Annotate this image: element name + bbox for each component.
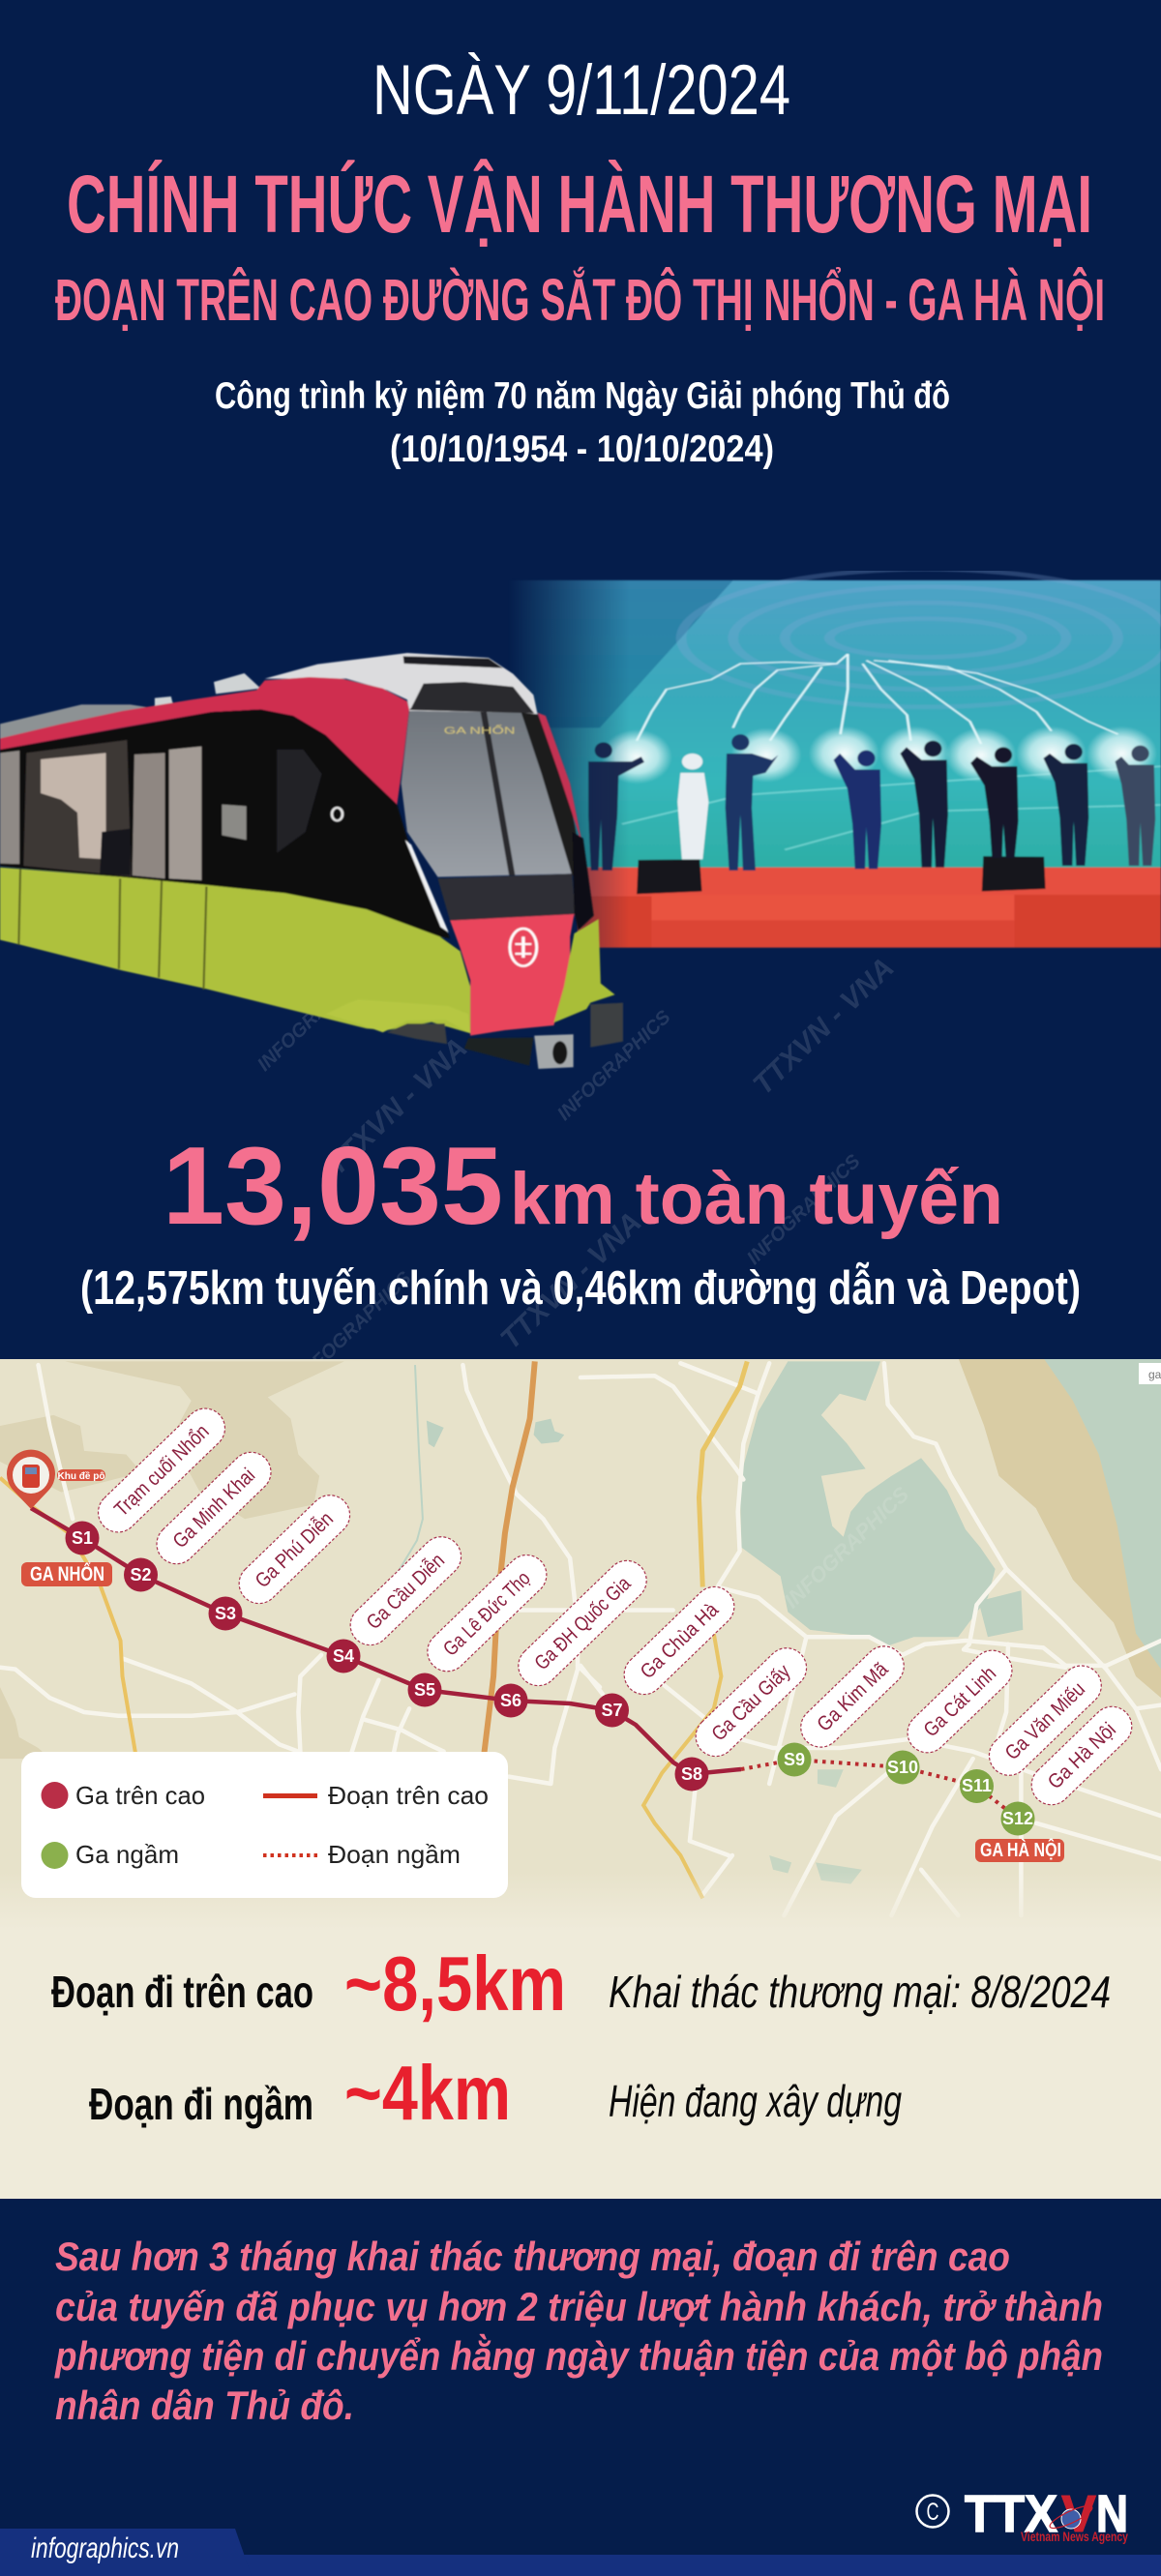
legend: underground segment: Đoạn ngầm [328, 1840, 461, 1869]
bottom fade into panel [0, 1872, 1161, 1930]
station S10 [886, 1751, 919, 1784]
watermarks over navy: INFOGRAPHICS [294, 1267, 416, 1386]
people [588, 742, 644, 871]
station S8 [675, 1757, 708, 1791]
station S4 [327, 1639, 360, 1673]
map search box fragment: ga [1148, 1368, 1161, 1381]
watermarks over navy: TTXVN - VNA [320, 1032, 474, 1181]
label S10: Ga Cát Linh [920, 1662, 1000, 1741]
label S12 [1024, 1699, 1140, 1813]
Hanoi emblem [510, 929, 537, 966]
watermarks over navy: INFOGRAPHICS [553, 1006, 675, 1125]
undercarriage [387, 1023, 447, 1044]
stat: elevated label: Đoạn đi trên cao [51, 1967, 313, 2017]
station S3 [209, 1596, 242, 1631]
white roof [265, 653, 538, 714]
speakers [637, 859, 702, 894]
summary paragraph: Sau hơn 3 tháng khai thác thương mại, đoạn đi trên cao [55, 2234, 1010, 2279]
photo: inauguration ceremony [474, 569, 1161, 948]
station name labels [90, 1401, 1140, 1813]
commemoration dates: (10/10/1954 - 10/10/2024) [390, 429, 774, 470]
TTXVN logo: V [1061, 2485, 1096, 2543]
label S9: Ga Kim Mã [813, 1658, 893, 1736]
label S8 [688, 1640, 815, 1764]
black side [0, 709, 450, 938]
label S8: Ga Cầu Giấy [707, 1660, 795, 1745]
cream panel background [0, 1359, 1161, 2199]
map panel: INFOGRAPHICS [779, 1482, 913, 1613]
length unit: km toàn tuyến [510, 1158, 1003, 1240]
header block [55, 51, 1105, 470]
white strip [405, 840, 449, 933]
legend: elevated station: Ga trên cao [75, 1781, 205, 1810]
station S1: S1 [72, 1528, 93, 1548]
label S1: Trạm cuối Nhổn [110, 1420, 214, 1521]
route line: underground section [741, 1760, 1018, 1819]
label S9 [792, 1638, 912, 1756]
station S4: S4 [333, 1646, 354, 1666]
website: infographics.vn [31, 2532, 179, 2564]
watermarks over navy: TTXVN - VNA [494, 1206, 648, 1355]
terminal tag: Ga Hà Nội: GA HÀ NỘI [980, 1838, 1061, 1861]
label S1 [90, 1401, 233, 1540]
station markers [66, 1521, 1035, 1836]
watermarks over navy: TTXVN - VNA [747, 952, 901, 1101]
station S12 [1000, 1801, 1035, 1836]
watermarks over navy [253, 952, 901, 1386]
stat: elevated value: ~8,5km [344, 1940, 566, 2027]
watermarks over navy: INFOGRAPHICS [743, 1150, 865, 1269]
station S10: S10 [887, 1758, 918, 1777]
stat: underground note: Hiện đang xây dựng [609, 2076, 902, 2126]
station S5: S5 [414, 1680, 435, 1700]
label S10 [900, 1643, 1020, 1761]
station S5 [408, 1673, 441, 1706]
legend: underground station: Ga ngầm [75, 1840, 179, 1869]
legend: elevated segment: Đoạn trên cao [328, 1781, 489, 1810]
commemoration line: Công trình kỷ niệm 70 năm Ngày Giải phóng Thủ đô [215, 375, 950, 417]
lower front band [437, 873, 575, 921]
station S11: S11 [962, 1776, 992, 1795]
label S2 [149, 1444, 279, 1572]
station S6: S6 [500, 1691, 521, 1710]
route line: elevated section [31, 1508, 741, 1774]
total length figure [163, 1125, 1003, 1248]
TTXVN logo: TTX [965, 2485, 1057, 2543]
copyright mark: C [927, 2499, 938, 2526]
station S1 [66, 1521, 99, 1555]
station S6 [493, 1683, 528, 1718]
label S4 [342, 1528, 469, 1653]
map search box fragment [1139, 1363, 1161, 1384]
label S11 [981, 1658, 1110, 1784]
label S3: Ga Phú Diễn [252, 1508, 338, 1592]
station S7: S7 [601, 1701, 623, 1720]
station S12: S12 [1002, 1809, 1033, 1828]
label S2: Ga Minh Khai [169, 1465, 259, 1553]
east part of map [580, 1358, 1161, 1915]
roof equipment [0, 704, 151, 740]
copyright mark [917, 2496, 948, 2527]
map legend [21, 1752, 508, 1898]
station S2 [124, 1557, 158, 1592]
red front [450, 914, 574, 1036]
date heading: NGÀY 9/11/2024 [372, 51, 790, 130]
summary paragraph: nhân dân Thủ đô. [55, 2383, 354, 2428]
map panel [0, 1358, 1161, 1930]
label S3 [231, 1487, 358, 1612]
label S12: Ga Hà Nội [1044, 1719, 1120, 1793]
stat: underground label: Đoạn đi ngầm [89, 2079, 313, 2129]
station S3: S3 [215, 1604, 236, 1623]
TTXVN logo [965, 2485, 1128, 2544]
stat: underground value: ~4km [344, 2050, 511, 2136]
stage [578, 868, 1161, 948]
right green corner [553, 919, 615, 1022]
TTXVN logo: N [1096, 2485, 1128, 2543]
side windows [23, 740, 132, 876]
TTXVN logo: Vietnam News Agency [1021, 2529, 1128, 2544]
station S11 [960, 1769, 994, 1803]
station S9 [778, 1743, 811, 1776]
door seams [18, 869, 206, 990]
station S2: S2 [130, 1565, 152, 1584]
footer band [0, 2529, 1161, 2576]
station S8: S8 [681, 1764, 702, 1784]
terminal tag: Ga Nhổn: GA NHỔN [30, 1562, 104, 1585]
illustration: metro train [0, 653, 623, 1069]
windscreen [402, 711, 572, 877]
label S6: Ga ĐH Quốc Gia [530, 1572, 636, 1674]
green lower body [0, 868, 470, 1033]
illustration: metro train: GA NHỔN [444, 725, 515, 736]
watermarks over navy: INFOGRAPHICS [253, 957, 375, 1076]
label S5: Ga Lê Đức Thọ [439, 1567, 535, 1661]
label S11: Ga Văn Miếu [1001, 1678, 1089, 1764]
label S7 [616, 1579, 742, 1703]
depot pin [7, 1450, 105, 1509]
depot label: Khu đề pô [58, 1470, 104, 1482]
label S7: Ga Chùa Hà [637, 1598, 723, 1683]
stats block [51, 1940, 1111, 2136]
station S9: S9 [784, 1750, 805, 1769]
length number: 13,035 [163, 1125, 503, 1248]
summary paragraph [54, 2234, 1103, 2428]
red upper body [0, 677, 409, 805]
label S4: Ga Cầu Diễn [363, 1550, 449, 1634]
west part of map [0, 1361, 600, 1784]
station S7 [595, 1693, 629, 1728]
